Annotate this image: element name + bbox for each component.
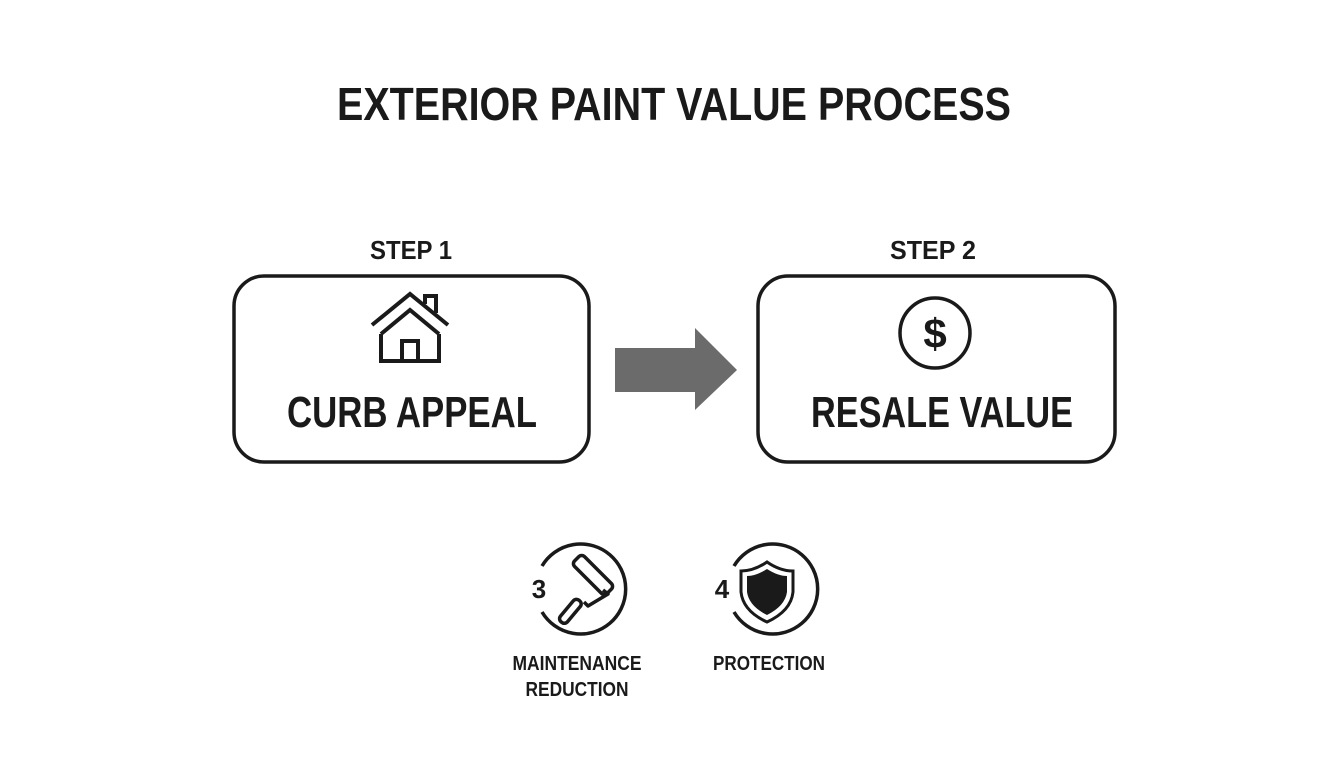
- label: MAINTENANCE: [512, 653, 642, 675]
- curb appeal text: CURB APPEAL: [287, 388, 537, 437]
- icon: shield in circle: [734, 544, 818, 634]
- title: EXTERIOR PAINT VALUE PROCESS: [337, 78, 1011, 130]
- number 4: 4: [715, 574, 730, 604]
- panel: step 2 resale value: [758, 235, 1115, 462]
- icon: dollar coin: $: [923, 310, 947, 357]
- step 1 label: STEP 1: [370, 235, 452, 265]
- box 2: [758, 276, 1115, 462]
- item 3: maintenance reduction: REDUCTION: [526, 679, 628, 701]
- resale value text: RESALE VALUE: [811, 388, 1073, 437]
- step 2 label: STEP 2: [890, 235, 976, 265]
- box 1: [234, 276, 589, 462]
- item 3: maintenance reduction: [512, 544, 642, 701]
- icon: dollar coin: [900, 298, 970, 368]
- arrow: [615, 328, 737, 410]
- icon: paint roller in circle: [542, 544, 626, 634]
- icon: house: [372, 294, 448, 361]
- number 3: 3: [532, 574, 546, 604]
- panel: step 1 curb appeal: [234, 235, 589, 462]
- item 4: protection: [713, 544, 825, 675]
- label: PROTECTION: [713, 653, 825, 675]
